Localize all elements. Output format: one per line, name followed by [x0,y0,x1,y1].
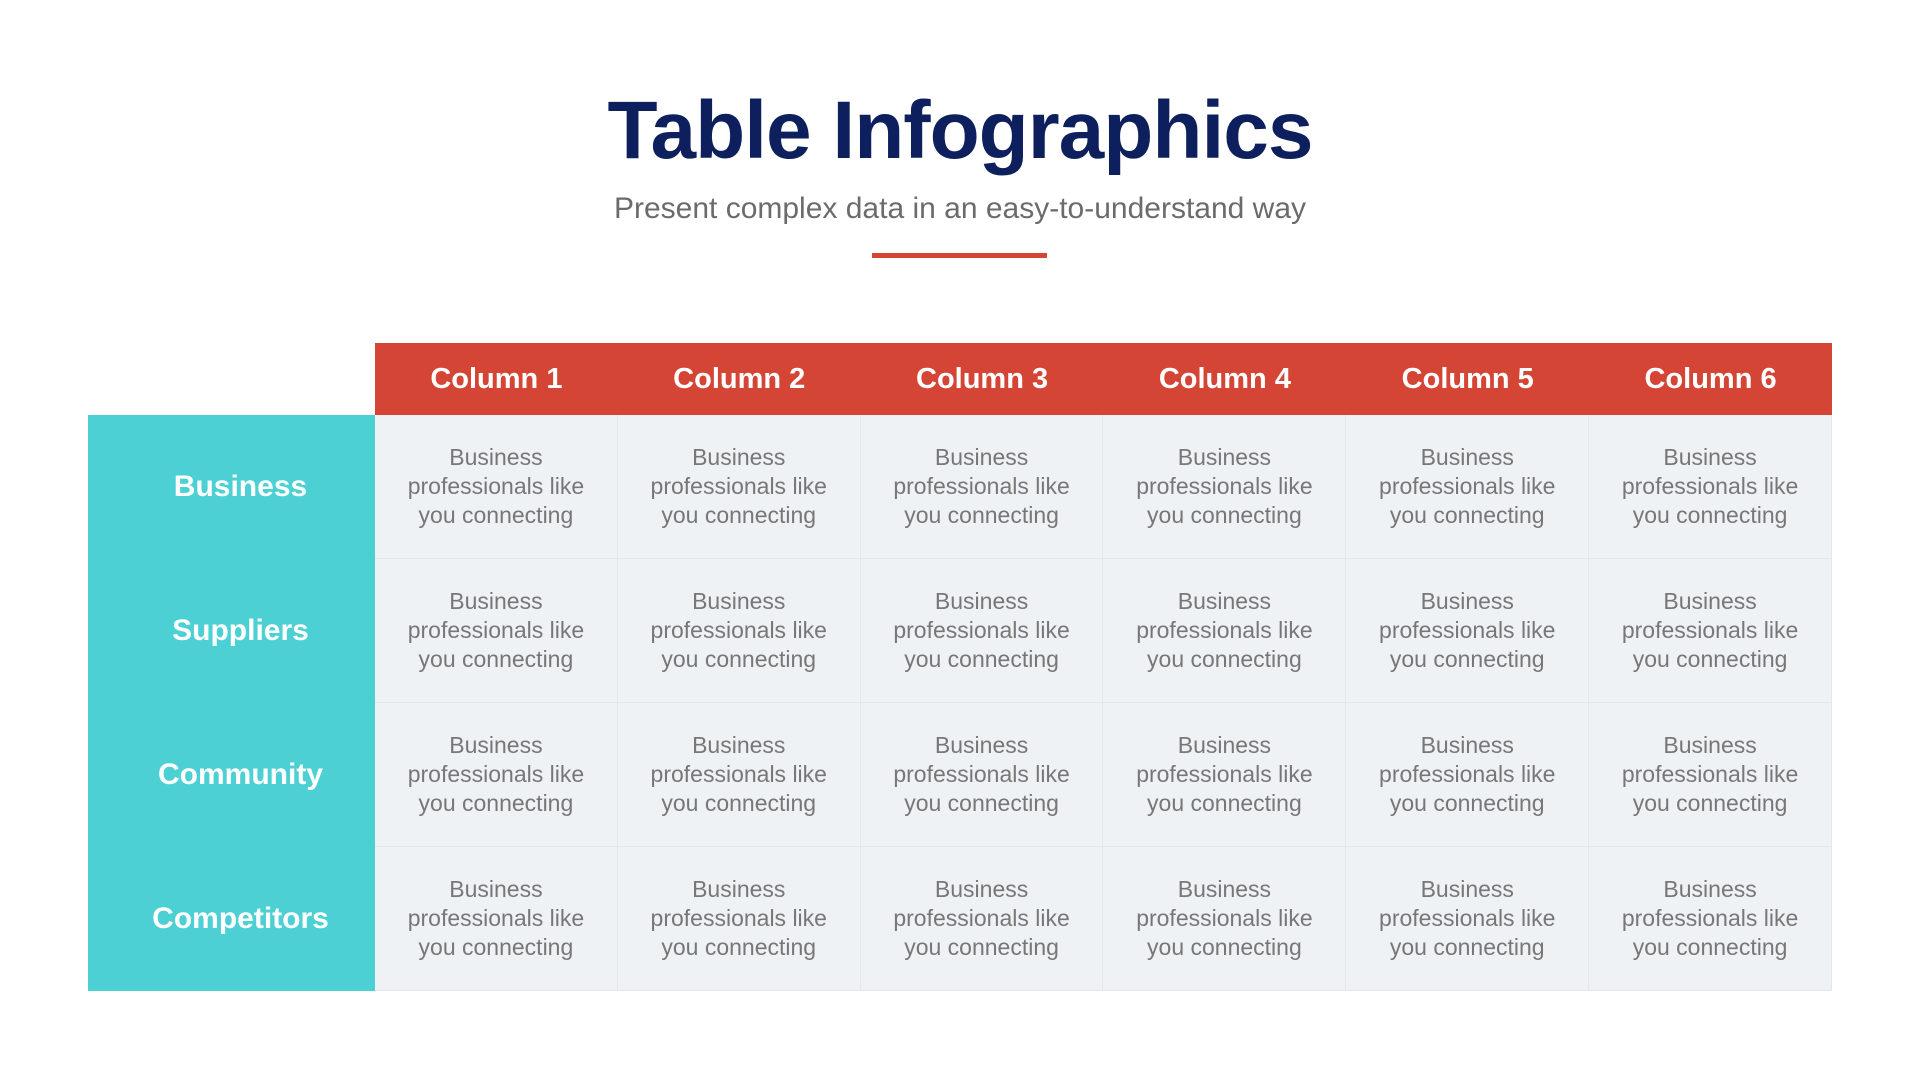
table cells: Business professionals like you connecting [1379,876,1555,960]
table cells: Business professionals like you connecting [1379,588,1555,672]
row labels: Suppliers [172,614,309,647]
table cells: Business professionals like you connecting [408,588,584,672]
table cells: Business professionals like you connecting [1379,444,1555,528]
table cells: Business professionals like you connecting [1622,588,1798,672]
table cells: Business professionals like you connecting [1136,444,1313,528]
table header: Column 5 [1402,362,1534,394]
table cells: Business professionals like you connecting [1136,732,1313,816]
table header: Column 6 [1644,362,1777,394]
table cells: Business professionals like you connecting [893,588,1070,672]
table cells: Business professionals like you connecting [651,876,827,960]
table cells: Business professionals like you connecting [1622,732,1798,816]
table cells: Business professionals like you connecting [651,444,827,528]
table cells: Business professionals like you connecting [893,444,1070,528]
table cells: Business professionals like you connecting [408,876,584,960]
table cells: Business professionals like you connecting [408,732,584,816]
table cells: Business professionals like you connecting [1622,444,1798,528]
table cells: Business professionals like you connecting [651,588,827,672]
table header: Column 3 [916,362,1048,394]
accent line [872,253,1047,258]
table header: Column 1 [430,362,562,394]
table cells: Business professionals like you connecting [1379,732,1555,816]
table header: Column 4 [1159,362,1291,394]
table cells: Business professionals like you connecting [1136,876,1313,960]
table cells [375,415,1832,991]
row labels: Community [158,758,323,791]
subtitle: Present complex data in an easy-to-understand way [614,192,1306,225]
row labels: Business [174,470,307,503]
table cells: Business professionals like you connecting [893,732,1070,816]
table cells: Business professionals like you connecting [893,876,1070,960]
table cells: Business professionals like you connecting [1622,876,1798,960]
row labels: Competitors [152,902,329,935]
table cells: Business professionals like you connecting [408,444,584,528]
row labels [88,415,375,991]
table cells: Business professionals like you connecting [1136,588,1313,672]
title: Table Infographics [608,85,1312,176]
table header: Column 2 [673,362,805,394]
table header [375,343,1832,415]
table cells: Business professionals like you connecting [651,732,827,816]
